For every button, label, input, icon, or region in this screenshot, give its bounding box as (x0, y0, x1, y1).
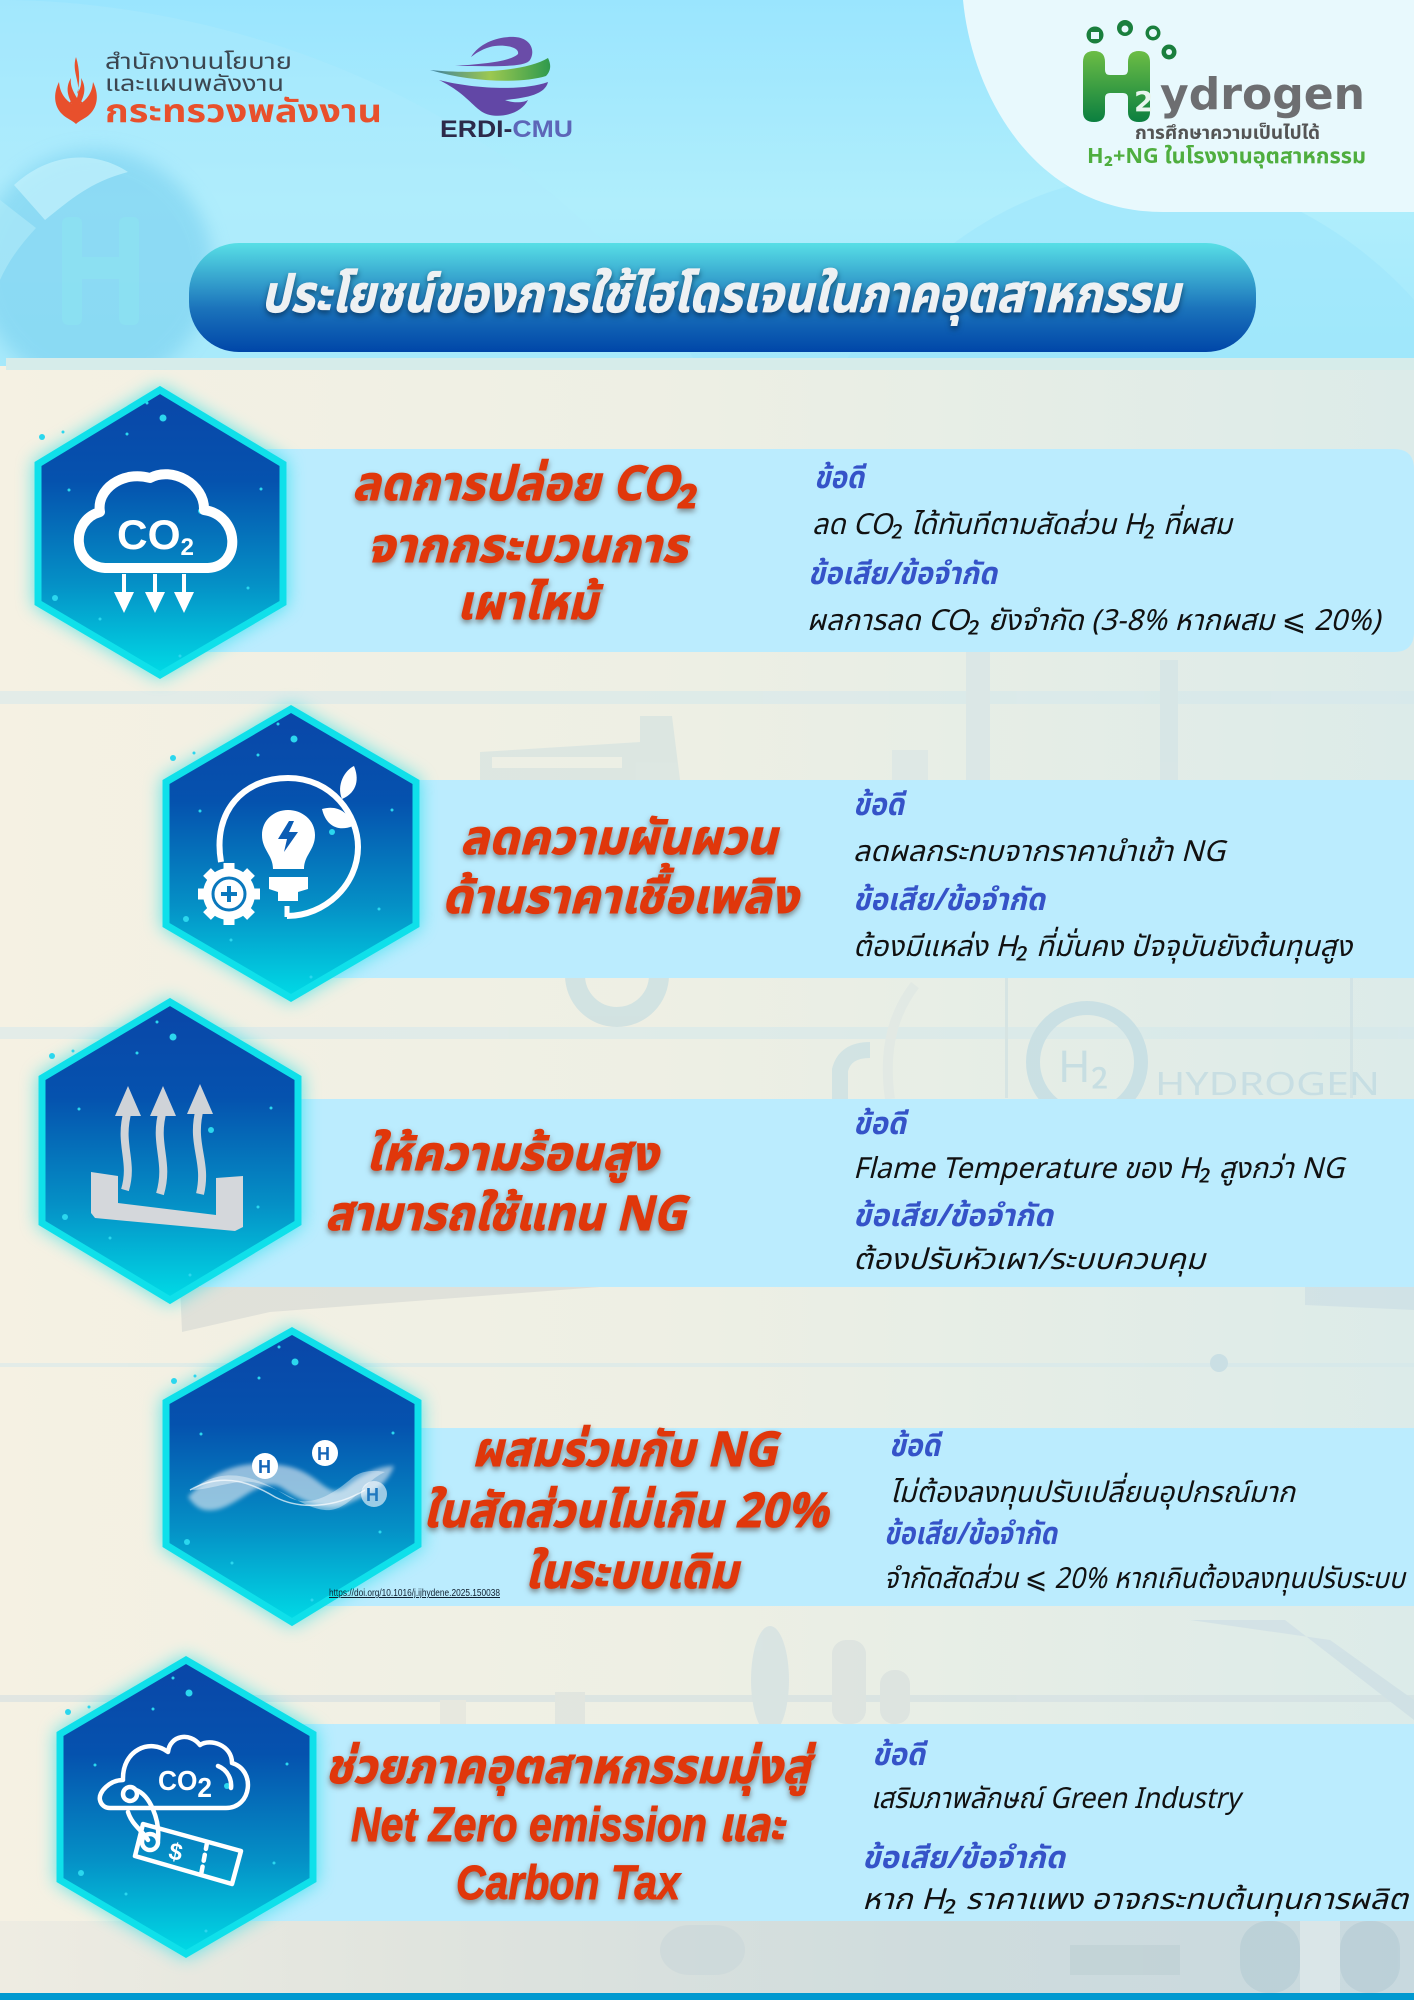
background: hydrogen atom circle (0, 150, 213, 386)
hexagon badge (162, 705, 420, 1002)
source link: https://doi.org/10.1016/j.ijhydene.2025.150038 (329, 1588, 500, 1599)
icon: bulb, gear and leaves (198, 766, 358, 925)
pros and cons: ไม่ต้องลงทุนปรับเปลี่ยนอุปกรณ์มาก (890, 1472, 1297, 1516)
text: CO2 in cloud: CO (158, 1765, 200, 1796)
text: CO2 in cloud: 2 (197, 1772, 212, 1803)
icon: CO2 cloud with arrows: CO (117, 511, 180, 558)
logo: Hydrogen (1083, 20, 1366, 173)
heading: ด้านราคาเชื้อเพลิง (442, 862, 801, 935)
pros and cons: ข้อดี (872, 1732, 928, 1779)
background: top translucent edge (6, 358, 1414, 370)
icon: gas wave with H2 molecules (188, 1440, 394, 1510)
pros and cons: ต้องมีแหล่ง H₂ ที่มั่นคง ปัจจุบันยังต้นทุนสูง (853, 926, 1353, 970)
band (200, 449, 1414, 652)
icon: gas wave with H2 molecules: H (317, 1444, 330, 1464)
heading: สามารถใช้แทน NG (325, 1179, 691, 1252)
bottom bar (0, 1993, 1414, 2000)
background: hill (840, 174, 1414, 370)
heading: จากกระบวนการ (367, 511, 690, 584)
icon: gas wave with H2 molecules: H (258, 1457, 271, 1477)
panel: price volatility (162, 705, 1414, 1002)
pros and cons: ต้องปรับหัวเผา/ระบบควบคุม (853, 1239, 1207, 1283)
icon: rising heat over tray (91, 1084, 243, 1231)
pros and cons (853, 1101, 1347, 1283)
text: 2: 2 (1134, 85, 1153, 118)
logo: energy policy office (55, 46, 382, 137)
pros and cons: ข้อดี (853, 782, 907, 829)
title banner (189, 243, 1256, 352)
band (320, 780, 1414, 978)
panel: net zero and carbon tax (56, 1656, 1414, 1958)
icon: flame (55, 57, 97, 124)
text: feasibility line: การศึกษาความเป็นไปได้ (1135, 119, 1320, 148)
panel: reduce CO2 (34, 386, 1414, 679)
heading: Net Zero emission และ (351, 1799, 787, 1852)
pros and cons: เสริมภาพลักษณ์ Green Industry (871, 1778, 1244, 1822)
background: footer tint (0, 1921, 1414, 1993)
logo: energy policy office: กระทรวงพลังงาน (105, 89, 382, 137)
background: faded industrial scenery: H₂ (1058, 1035, 1108, 1102)
pros and cons: ข้อเสีย/ข้อจำกัด (808, 551, 998, 598)
logo: energy policy office: และแผนพลังงาน (105, 68, 284, 101)
panel: high heat (38, 998, 1414, 1304)
text: dollar on tag: $ (166, 1838, 186, 1867)
heading: ให้ความร้อนสูง (366, 1119, 661, 1192)
band (200, 1099, 1414, 1287)
icon: CO2 cloud with arrows (79, 474, 232, 613)
heading: ในระบบเดิม (525, 1537, 742, 1610)
text: ydrogen: ydrogen (1160, 69, 1365, 120)
icon: CO2 cloud with arrows: 2 (181, 534, 194, 561)
icon: small green circles (1086, 20, 1176, 60)
pros and cons: หาก H₂ ราคาแพง อาจกระทบต้นทุนการผลิต (862, 1879, 1410, 1923)
pros and cons (807, 455, 1382, 644)
panel: co-firing (162, 1327, 1414, 1626)
pros and cons: ข้อเสีย/ข้อจำกัด (862, 1835, 1066, 1882)
heading: ในสัดส่วนไม่เกิน 20% (423, 1476, 831, 1549)
text: ERDI-CMU: ERDI- CMU (440, 116, 573, 143)
icon: big H (1083, 51, 1150, 122)
pros and cons: ข้อดี (814, 455, 867, 502)
icon: gas wave with H2 molecules: H (366, 1485, 379, 1505)
logo: ERDI-CMU (430, 37, 573, 143)
heading: ลดความผันผวน (460, 803, 780, 876)
heading: เผาไหม้ (457, 568, 604, 641)
pros and cons: ลด CO₂ ได้ทันทีตามสัดส่วน H₂ ที่ผสม (812, 504, 1234, 548)
icon: CO2 cloud and price tag (100, 1737, 248, 1884)
pros and cons: ข้อเสีย/ข้อจำกัด (853, 1193, 1054, 1240)
pros and cons: ข้อเสีย/ข้อจำกัด (853, 877, 1046, 924)
pros and cons: ข้อเสีย/ข้อจำกัด (884, 1511, 1058, 1558)
hexagon badge (56, 1656, 317, 1958)
heading: ลดการปล่อย CO₂ (352, 449, 699, 522)
hexagon badge (38, 998, 302, 1304)
background: faded industrial scenery (0, 652, 1414, 1993)
heading: ผสมร่วมกับ NG (472, 1415, 782, 1488)
pros and cons: Flame Temperature ของ H₂ สูงกว่า NG (853, 1148, 1347, 1192)
hexagon badge (162, 1327, 422, 1626)
band (250, 1724, 1414, 1921)
background: faded industrial scenery: HYDROGEN (1155, 1062, 1380, 1110)
pros and cons: ข้อดี (853, 1101, 909, 1148)
pros and cons: ลดผลกระทบจากราคานำเข้า NG (853, 831, 1228, 875)
pros and cons: ผลการลด CO₂ ยังจำกัด (3-8% หากผสม ⩽ 20%) (807, 600, 1382, 644)
background: corner panel (963, 0, 1414, 212)
background: sky (0, 0, 1414, 370)
band (320, 1428, 1414, 1606)
heading (442, 803, 801, 935)
heading: title: ประโยชน์ของการใช้ไฮโดรเจนในภาคอุตสาหกรรม (261, 258, 1184, 336)
heading: Carbon Tax (456, 1857, 682, 1910)
heading (423, 1415, 831, 1610)
heading (352, 449, 699, 641)
pros and cons (853, 782, 1353, 970)
heading: ช่วยภาคอุตสาหกรรมมุ่งสู่ (325, 1732, 817, 1805)
pros and cons: ข้อดี (889, 1423, 943, 1470)
heading (325, 1732, 817, 1910)
background: soft swoosh (0, 0, 700, 370)
pros and cons (862, 1732, 1410, 1923)
icon: swirl (430, 37, 550, 116)
text: office name: สำนักงานนโยบาย (105, 46, 292, 79)
heading (325, 1119, 691, 1252)
hexagon badge (34, 386, 287, 679)
pros and cons (884, 1423, 1407, 1602)
text: H2+NG line: H₂+NG ในโรงงานอุตสาหกรรม (1087, 142, 1366, 173)
